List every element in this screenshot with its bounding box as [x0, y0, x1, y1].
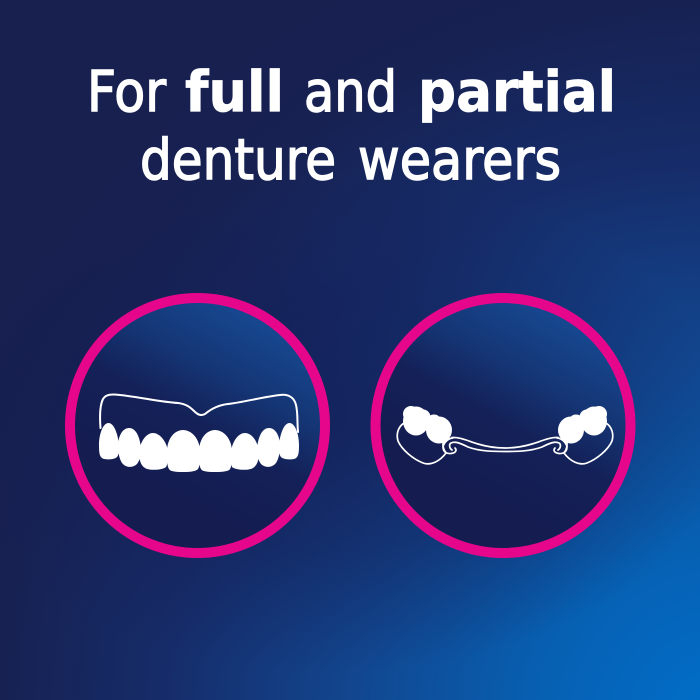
title line 1: full — [185, 60, 284, 125]
title line 2 — [140, 128, 561, 193]
denture teeth — [99, 423, 299, 472]
circle ring right — [376, 298, 630, 553]
connecting bar — [443, 437, 567, 454]
left teeth — [403, 406, 452, 444]
icon: full denture — [70, 298, 325, 553]
title line 2: denture — [140, 128, 336, 193]
title line 1 — [87, 60, 616, 125]
right base outline — [564, 423, 613, 464]
denture gum outline — [100, 394, 298, 432]
title line 2: wearers — [358, 128, 561, 193]
title line 1: partial — [418, 60, 616, 125]
title — [87, 60, 616, 193]
left base outline — [397, 423, 446, 464]
title line 1: and — [304, 60, 397, 125]
right teeth — [558, 406, 607, 444]
title line 1: For — [87, 60, 167, 125]
circle ring left — [70, 298, 325, 553]
icon: partial denture — [376, 298, 630, 553]
